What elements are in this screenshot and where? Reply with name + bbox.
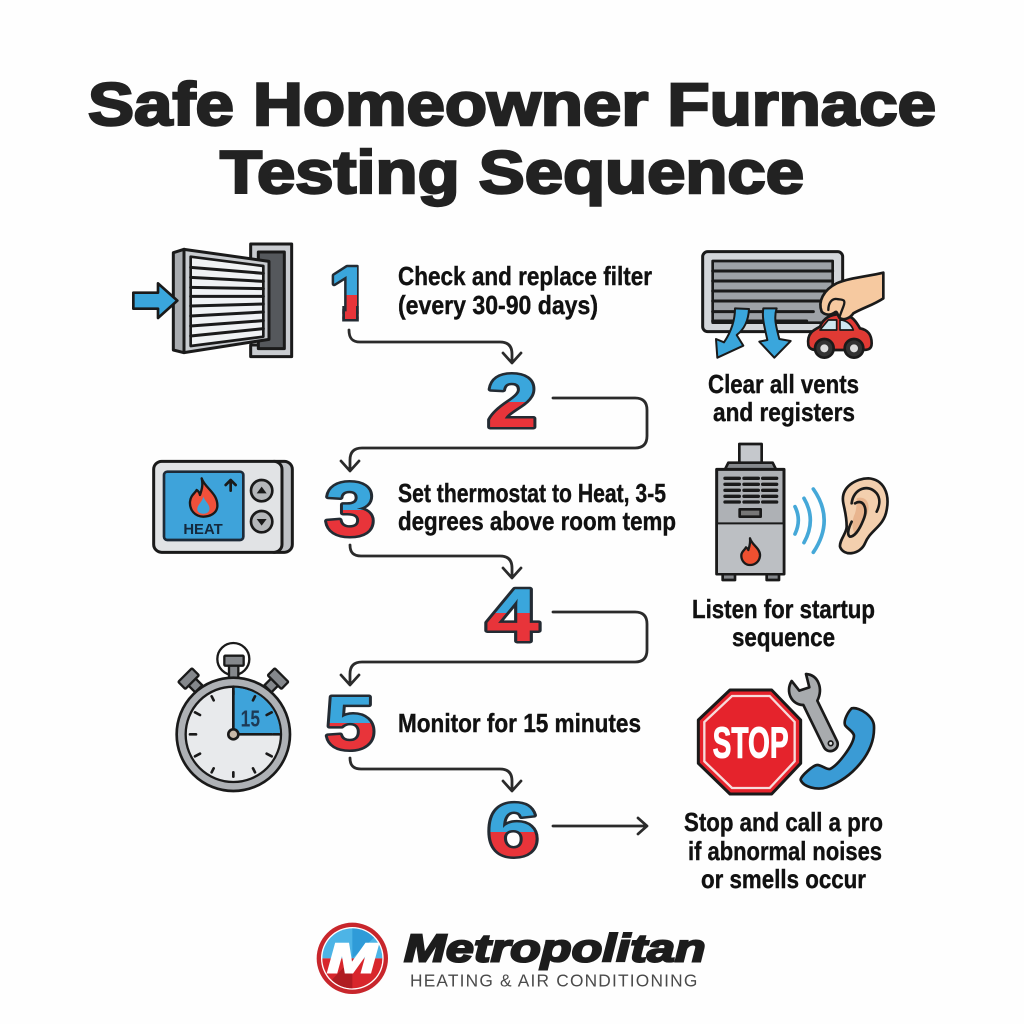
icon: stop sign, wrench, phone xyxy=(698,674,874,794)
step 4 text: Listen for startup xyxy=(692,594,875,624)
icon: air filter xyxy=(133,244,292,357)
step 3 text xyxy=(398,478,676,536)
company name: Metropolitan xyxy=(404,926,706,970)
step number 6: 6 xyxy=(487,788,539,872)
step number 4: 4 xyxy=(486,573,539,657)
step 6 text: if abnormal noises xyxy=(688,836,882,866)
icon: thermostat xyxy=(154,461,292,552)
up button xyxy=(251,480,272,501)
logo badge: M xyxy=(327,935,379,982)
step 6 text: Stop and call a pro xyxy=(684,807,883,837)
flame xyxy=(190,478,217,517)
step 5 text: Monitor for 15 minutes xyxy=(398,708,641,738)
step 3 text: Set thermostat to Heat, 3-5 xyxy=(398,478,666,508)
step 2 text: and registers xyxy=(713,397,855,427)
arrow: step 5 to 6 xyxy=(350,758,521,791)
title: Testing Sequence xyxy=(220,139,804,206)
icon: stopwatch xyxy=(177,643,290,791)
step 4 text xyxy=(692,594,875,652)
up arrow xyxy=(226,480,236,491)
step number 1 xyxy=(332,264,359,322)
step 6 text xyxy=(684,807,883,894)
wrench xyxy=(789,674,838,751)
title xyxy=(88,71,936,206)
arrow: step 3 to 4 xyxy=(350,545,521,578)
phone handset xyxy=(801,708,874,789)
step 2 text: Clear all vents xyxy=(708,369,859,399)
sound waves xyxy=(795,489,824,552)
step 2 text xyxy=(708,369,859,427)
heat label: HEAT xyxy=(183,521,223,538)
icon: vent with blocked airflow xyxy=(703,252,883,358)
vent airflow arrows xyxy=(716,308,791,358)
timer label: 15 xyxy=(241,706,260,732)
arrow: step 4 to 5 xyxy=(341,612,647,685)
step 1 text: Check and replace filter xyxy=(398,261,652,291)
step number 3: 3 xyxy=(325,467,375,551)
step number 5: 5 xyxy=(325,681,375,765)
infographic canvas xyxy=(88,80,936,994)
logo badge xyxy=(317,923,388,994)
step 4 text: sequence xyxy=(732,622,835,652)
step number 1: 1 xyxy=(329,251,371,335)
15-minute wedge xyxy=(233,688,280,734)
arrow: step 6 to stop text xyxy=(553,818,647,834)
toy car xyxy=(808,314,872,358)
arrow: step 2 to 3 xyxy=(341,398,647,471)
company tagline: HEATING & AIR CONDITIONING xyxy=(410,970,697,990)
step 1 text: (every 30-90 days) xyxy=(398,290,598,320)
title: Safe Homeowner Furnace xyxy=(88,71,936,138)
icon: furnace with sound and ear xyxy=(717,444,888,580)
stop sign xyxy=(698,690,801,794)
logo xyxy=(317,923,706,994)
down button xyxy=(251,511,272,532)
step 3 text: degrees above room temp xyxy=(398,506,676,536)
furnace xyxy=(717,444,784,580)
step number 2: 2 xyxy=(487,359,537,443)
step 1 text xyxy=(398,261,652,320)
ear xyxy=(840,478,888,553)
stop sign: STOP xyxy=(713,719,789,767)
hand xyxy=(820,273,883,319)
filter airflow arrow xyxy=(133,283,177,318)
arrow: step 1 to 2 xyxy=(349,330,521,363)
step 6 text: or smells occur xyxy=(701,864,866,894)
